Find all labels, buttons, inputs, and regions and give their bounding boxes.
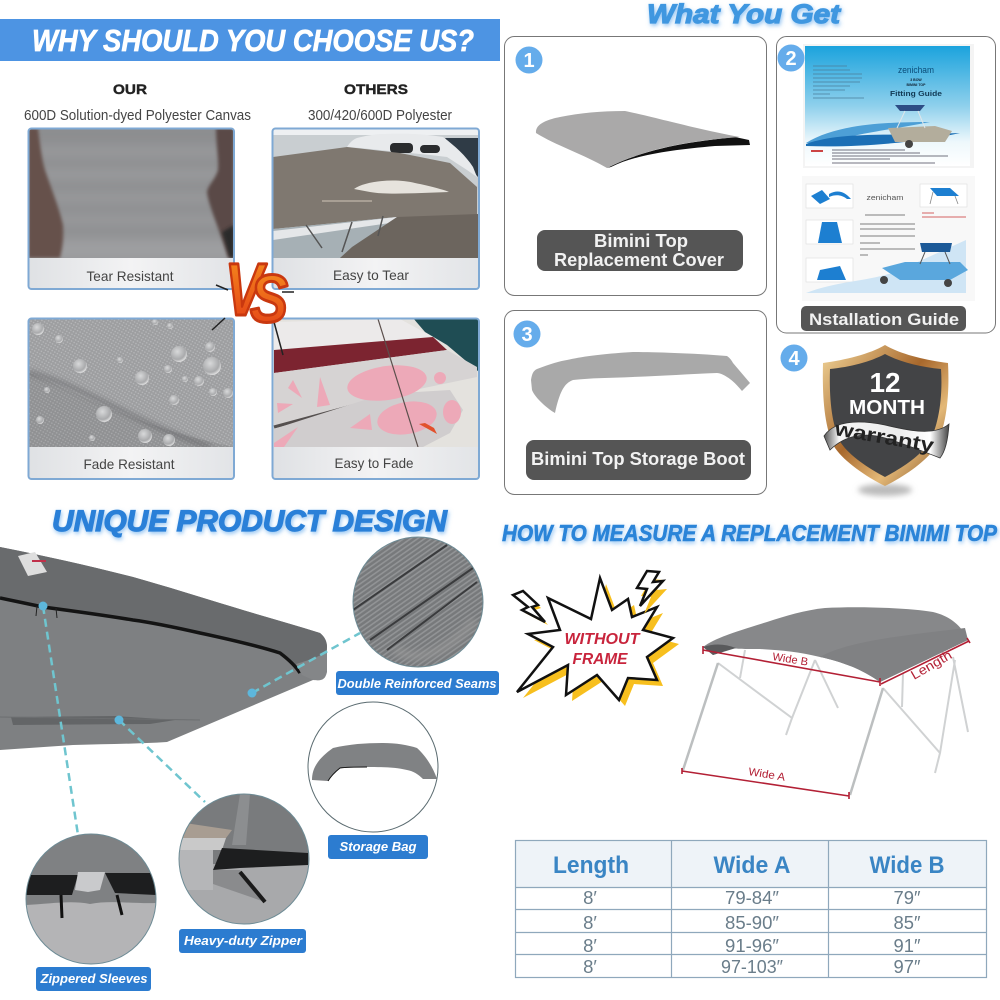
banner title: WHY SHOULD YOU CHOOSE US? — [32, 23, 474, 58]
illustration: bimini frame and measurements — [682, 607, 970, 799]
label: double reinforced seams: Double Reinforced Seams — [338, 676, 496, 691]
label: installation guide: Nstallation Guide — [809, 310, 959, 329]
label: zippered sleeves — [36, 967, 151, 991]
table rows: 8′ — [583, 935, 597, 956]
label: storage bag — [328, 835, 428, 859]
table rows: 91″ — [894, 935, 921, 956]
caption: fade resistant: Fade Resistant — [84, 456, 175, 472]
dashed connector: zippered sleeves — [38, 602, 78, 835]
icon: 12 month warranty shield: 12 — [870, 367, 900, 398]
panel: tear resistant — [28, 128, 235, 290]
panel: easy to fade — [272, 318, 479, 479]
document: fitting guide: BIMINI TOP — [906, 83, 926, 87]
table rows: 85″ — [894, 912, 921, 933]
icon: without frame burst: FRAME — [572, 651, 628, 668]
label: replacement cover: Replacement Cover — [554, 250, 724, 270]
column heading: our: OUR — [113, 81, 147, 97]
illustration: storage boot — [531, 352, 750, 413]
document: installation instructions — [802, 176, 975, 301]
panel: fade resistant — [28, 318, 234, 479]
table header: Wide A — [714, 852, 790, 879]
badge 2 — [778, 44, 804, 72]
table rows: 97-103″ — [721, 956, 783, 977]
callout: zippered sleeves — [25, 834, 157, 991]
heading: unique product design: UNIQUE PRODUCT DESIGN — [52, 505, 448, 538]
document: installation instructions: zenicham — [866, 193, 904, 202]
material text: others: 300/420/600D Polyester — [308, 108, 452, 124]
dashed connector: double reinforced seams — [248, 633, 360, 698]
banner: why should you choose us — [0, 19, 500, 61]
caption: easy to tear: Easy to Tear — [333, 267, 409, 283]
caption: easy to fade: Easy to Fade — [334, 455, 414, 471]
table rows: 8′ — [583, 912, 597, 933]
label: replacement cover — [537, 230, 743, 271]
label: installation guide — [801, 306, 966, 331]
measurement: wide b — [703, 646, 880, 686]
table rows — [583, 887, 921, 977]
measurement: wide a: Wide A — [748, 766, 787, 784]
icon: 12 month warranty shield: MONTH — [849, 396, 925, 419]
illustration: canopy underside — [0, 547, 327, 750]
measurement: length: Length — [908, 647, 954, 683]
badge 1 — [516, 46, 542, 74]
label: storage boot: Bimini Top Storage Boot — [531, 449, 745, 469]
badge 4 — [780, 344, 808, 372]
table rows: 79″ — [894, 887, 921, 908]
label: heavy-duty zipper: Heavy-duty Zipper — [184, 933, 303, 948]
measurement: wide a — [682, 766, 849, 799]
caption: tear resistant: Tear Resistant — [86, 268, 174, 284]
icon: without frame burst — [513, 571, 679, 706]
label: storage boot — [526, 440, 751, 480]
measurement: length — [881, 638, 970, 684]
document: fitting guide: Fitting Guide — [890, 89, 942, 98]
illustration: bimini top cover — [536, 111, 750, 168]
table header — [553, 852, 944, 879]
table rows: 8′ — [583, 956, 597, 977]
measurement: wide b: Wide B — [772, 651, 809, 669]
panel: installation guide — [776, 36, 996, 333]
panel: easy to tear — [272, 128, 479, 289]
callout: double reinforced seams — [336, 535, 499, 695]
icon: VS badge: V — [225, 248, 267, 331]
document: fitting guide: 3 BOW — [910, 78, 922, 82]
table rows: 85-90″ — [725, 912, 779, 933]
table header: Length — [553, 852, 629, 879]
material text: our: 600D Solution-dyed Polyester Canvas — [24, 108, 251, 124]
table rows: 91-96″ — [725, 935, 779, 956]
table header: Wide B — [870, 852, 944, 879]
icon: without frame burst: WITHOUT — [564, 631, 641, 648]
callout: heavy-duty zipper — [178, 794, 310, 953]
icon: VS badge — [212, 248, 294, 355]
label: zippered sleeves: Zippered Sleeves — [39, 971, 148, 986]
size table — [516, 840, 986, 978]
column heading: others: OTHERS — [344, 81, 408, 97]
table rows: 97″ — [894, 956, 921, 977]
panel: replacement cover — [504, 36, 766, 296]
dashed connector: heavy-duty zipper — [114, 716, 205, 802]
icon: 12 month warranty shield — [823, 345, 949, 496]
table rows: 8′ — [583, 887, 597, 908]
label: storage bag: Storage Bag — [340, 839, 417, 854]
callout: storage bag — [308, 702, 438, 859]
badge 4: 4 — [788, 348, 800, 370]
label: heavy-duty zipper — [179, 929, 306, 953]
table rows: 79-84″ — [725, 887, 779, 908]
document: fitting guide: zenicham — [898, 65, 934, 75]
document: fitting guide — [803, 44, 974, 168]
icon: VS badge: S — [250, 261, 288, 337]
badge 3 — [514, 320, 540, 348]
badge 2: 2 — [785, 48, 797, 70]
canopy — [703, 607, 968, 682]
label: double reinforced seams — [336, 671, 499, 695]
panel: storage boot — [504, 310, 766, 494]
icon: 12 month warranty shield: warranty — [832, 418, 936, 457]
badge 1: 1 — [523, 50, 535, 72]
badge 3: 3 — [521, 324, 533, 346]
label: replacement cover: Bimini Top — [594, 231, 688, 251]
